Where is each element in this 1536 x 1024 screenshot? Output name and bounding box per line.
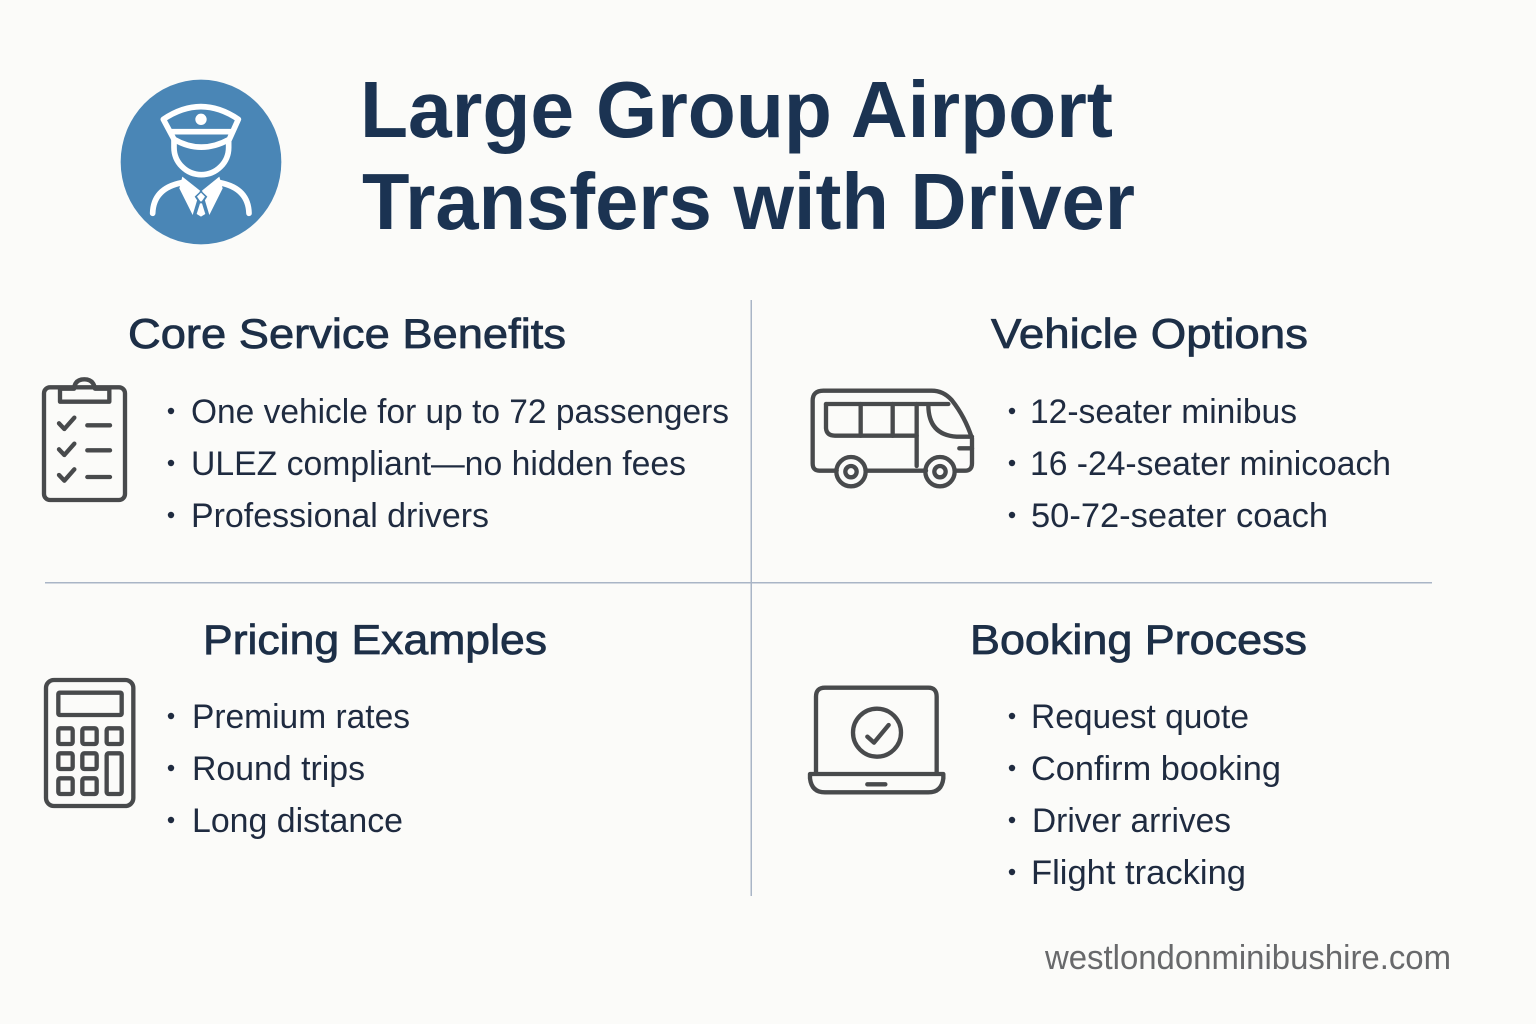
benefits list bbox=[168, 393, 729, 535]
title: Transfers with Driver bbox=[362, 157, 1135, 246]
icon: laptop with check mark bbox=[810, 688, 943, 792]
heading: pricing examples: Pricing Examples bbox=[203, 616, 547, 663]
heading: core service benefits: Core Service Benefits bbox=[128, 310, 566, 357]
booking steps list: Confirm booking bbox=[1031, 750, 1281, 788]
booking steps list: Flight tracking bbox=[1031, 854, 1246, 892]
panel: pricing examples bbox=[46, 616, 547, 840]
vehicle list: 50-72-seater coach bbox=[1031, 497, 1328, 535]
pricing list: Premium rates bbox=[192, 698, 410, 736]
heading: booking process: Booking Process bbox=[970, 616, 1307, 663]
pricing list: Long distance bbox=[192, 802, 403, 840]
icon: minibus bbox=[813, 391, 972, 486]
icon: clipboard checklist bbox=[44, 379, 125, 500]
benefits list: ULEZ compliant—no hidden fees bbox=[191, 445, 686, 483]
website footer: westlondonminibushire.com bbox=[1044, 939, 1451, 977]
pricing list: Round trips bbox=[192, 750, 365, 788]
booking steps list bbox=[1009, 698, 1281, 892]
title bbox=[360, 65, 1135, 246]
icon: chauffeur in blue circle bbox=[121, 80, 281, 244]
benefits list: One vehicle for up to 72 passengers bbox=[191, 393, 729, 431]
benefits list: Professional drivers bbox=[191, 497, 489, 535]
horizontal divider bbox=[45, 582, 1432, 584]
panel: booking process bbox=[810, 616, 1307, 892]
pricing list bbox=[168, 698, 410, 840]
panel: core service benefits bbox=[44, 310, 729, 535]
icon: calculator bbox=[46, 680, 133, 806]
vertical divider bbox=[750, 300, 752, 896]
vehicle list: 12-seater minibus bbox=[1030, 393, 1297, 431]
booking steps list: Request quote bbox=[1031, 698, 1249, 736]
heading: vehicle options: Vehicle Options bbox=[991, 310, 1308, 357]
vehicle list: 16 -24-seater minicoach bbox=[1030, 445, 1391, 483]
booking steps list: Driver arrives bbox=[1032, 802, 1231, 840]
panel: vehicle options bbox=[813, 310, 1391, 535]
title: Large Group Airport bbox=[360, 65, 1113, 154]
vehicle list bbox=[1009, 393, 1391, 535]
